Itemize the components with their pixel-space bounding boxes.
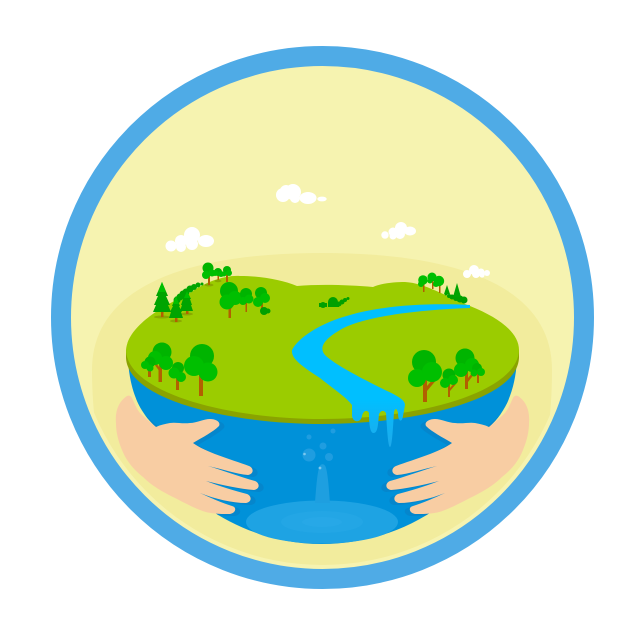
cloud: right: [381, 222, 416, 240]
outer blue ring: [61, 56, 584, 579]
cloud: left: [166, 227, 214, 252]
hedge along ridge: [174, 282, 204, 304]
trees: upper left group: [202, 262, 270, 318]
pine trees: upper left: [153, 282, 204, 322]
trees: lower right group: [408, 348, 485, 402]
finger shadows: right: [382, 398, 509, 516]
left hand: [116, 396, 264, 516]
fountain jet: [315, 464, 330, 503]
water pool: [246, 500, 398, 544]
cloud: top centre: [276, 184, 327, 204]
river with waterfall drips: [292, 304, 470, 447]
hedge along right ridge: [444, 292, 468, 304]
finger shadows: left: [136, 398, 264, 516]
hand: right: [386, 396, 529, 514]
bush by tree: [260, 307, 270, 315]
green land: [126, 276, 519, 419]
right hand: [381, 396, 529, 516]
bubbles: [302, 428, 336, 469]
bushes: centre: [319, 297, 350, 308]
hand: left: [116, 396, 259, 514]
background hill band: [92, 253, 552, 565]
trees and pines: upper right: [418, 272, 468, 304]
cloud: far right: [463, 265, 490, 278]
water bowl: [128, 360, 517, 544]
trees: lower left group: [141, 342, 218, 396]
clouds: [166, 184, 490, 278]
land rim: [126, 350, 519, 424]
